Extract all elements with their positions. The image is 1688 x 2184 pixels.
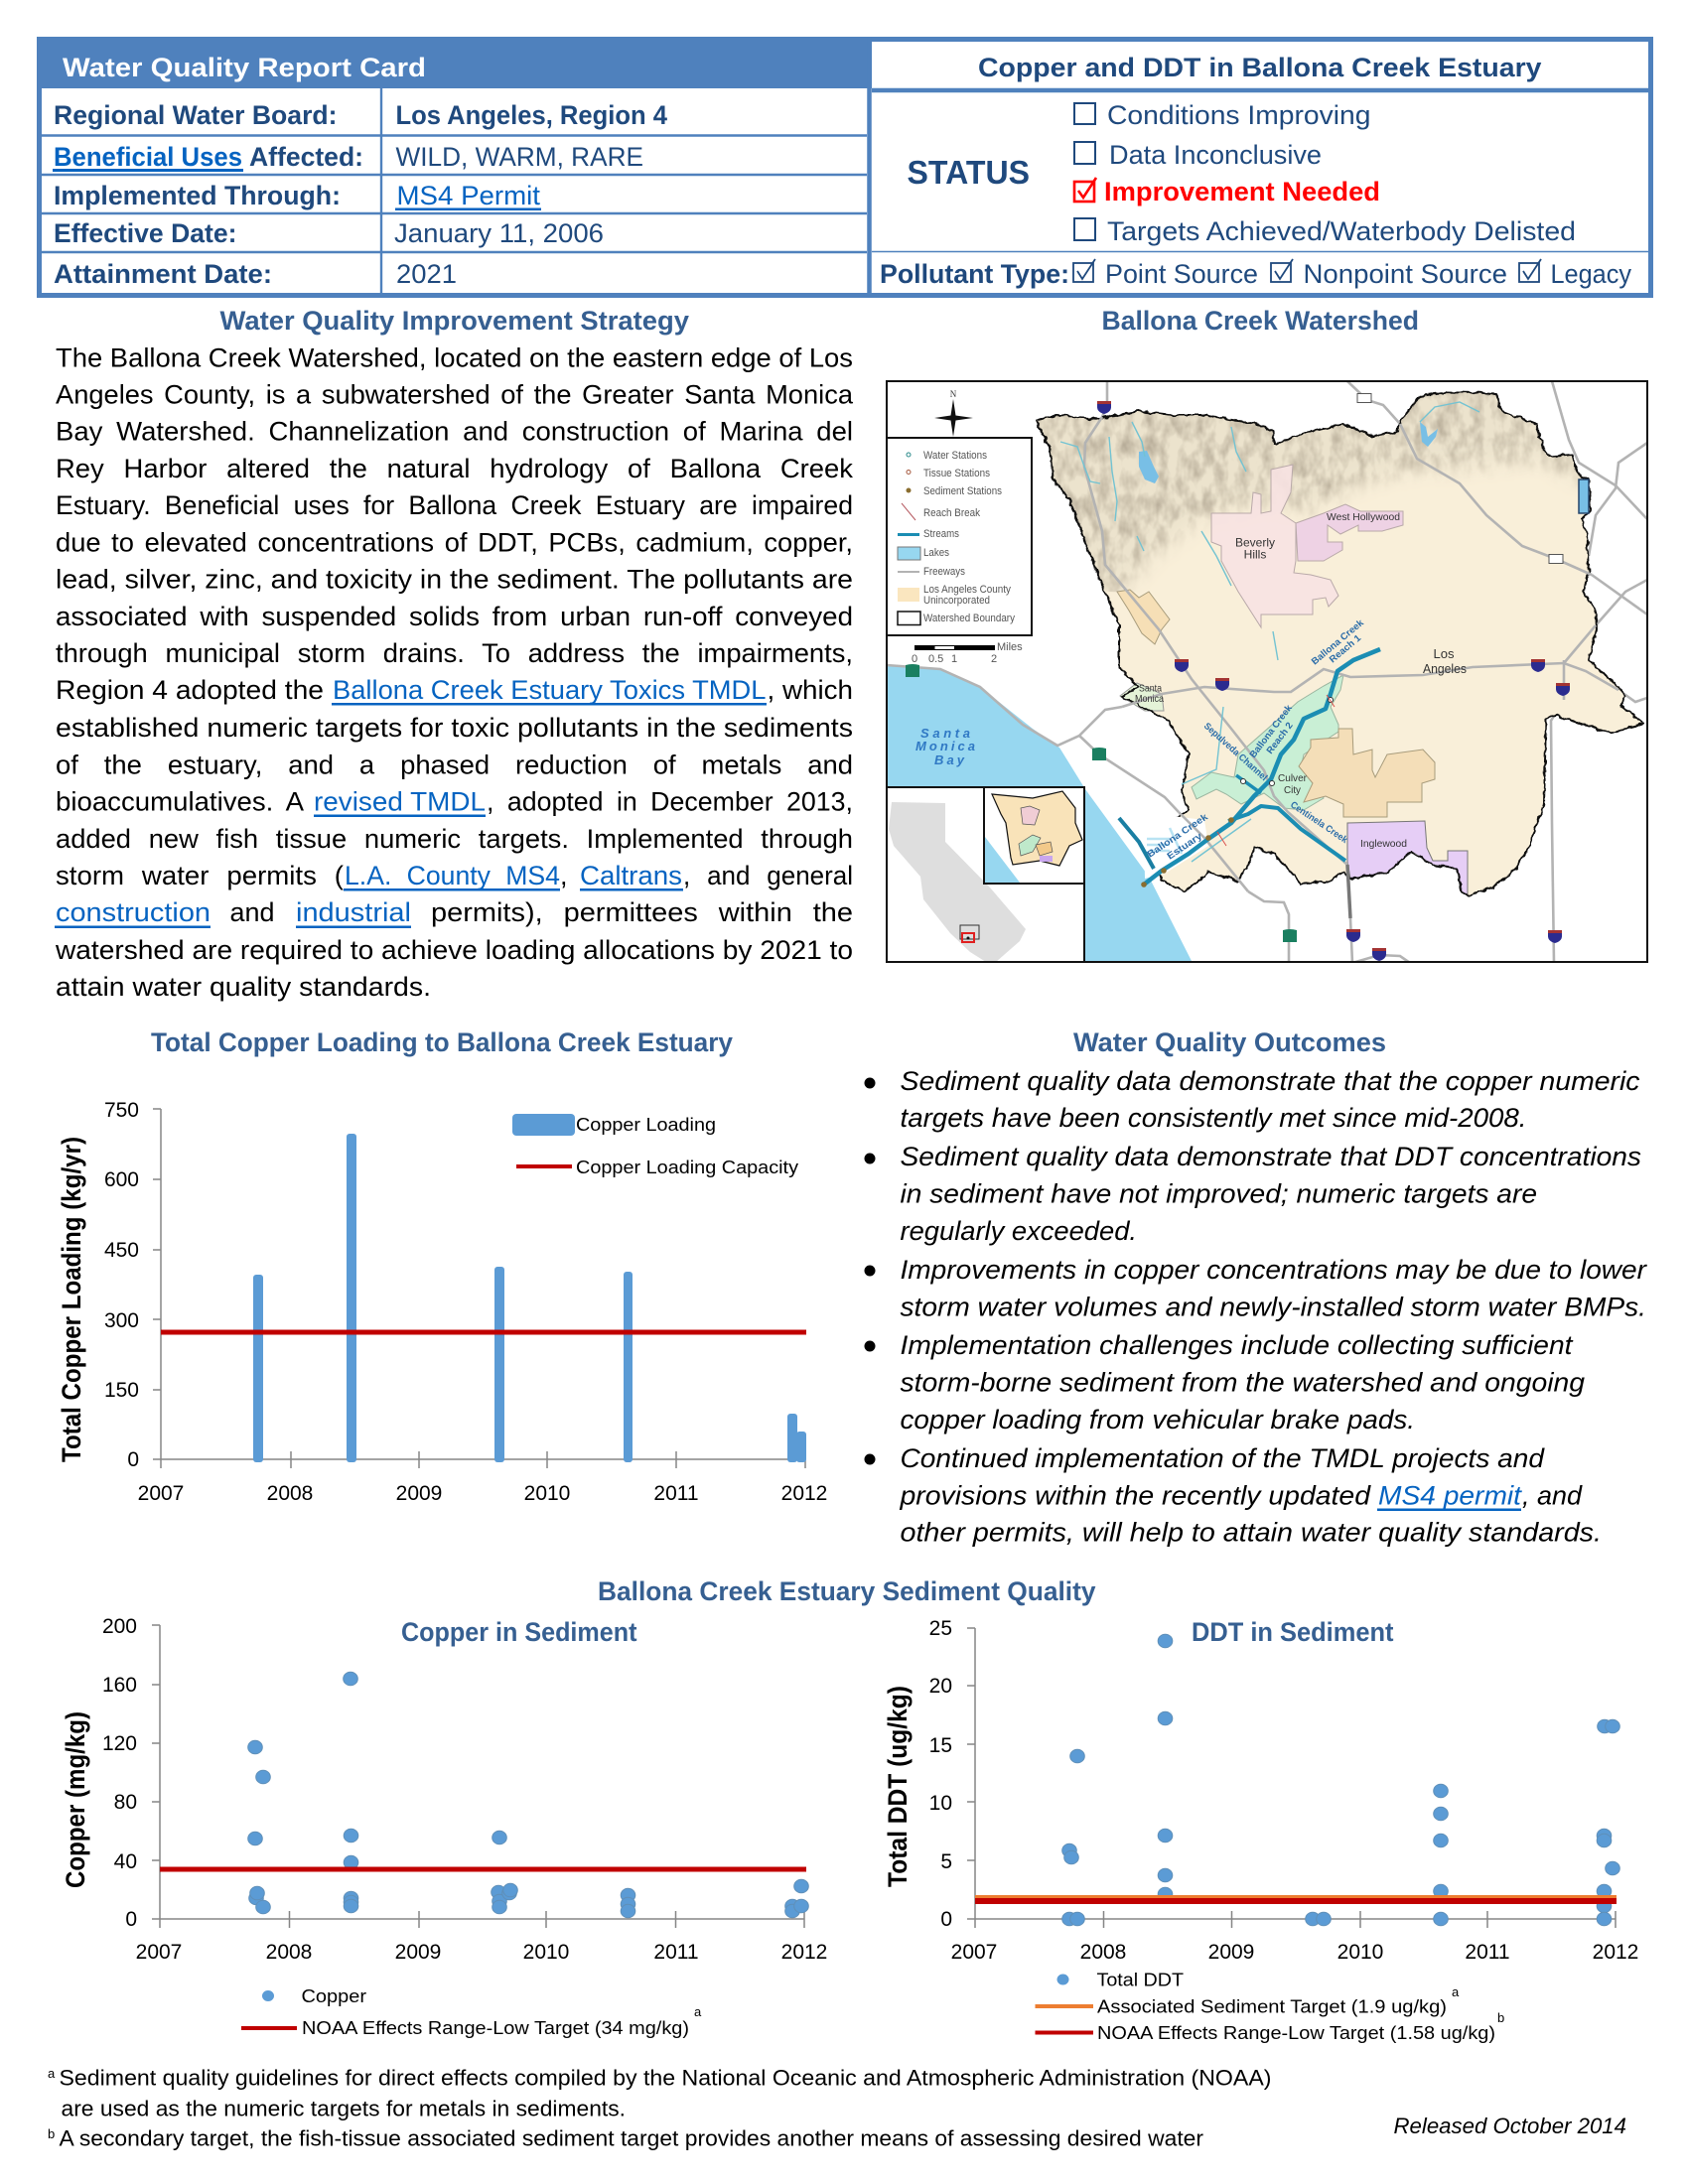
city labels: Culver <box>1278 772 1307 784</box>
x axis labels: 2012 <box>781 1482 827 1505</box>
NOAA target line <box>160 1866 806 1872</box>
stream labels: Ballona Creek <box>1310 617 1366 667</box>
scale bar: 0 <box>912 653 917 665</box>
strategy paragraph: attain water quality standards. <box>56 972 431 1002</box>
row: Regional Water Board: Los Angeles, Region 4 <box>395 100 667 130</box>
x axis labels: 2010 <box>1337 1941 1383 1964</box>
x axis labels: 2010 <box>523 1941 569 1964</box>
x axis labels <box>136 1941 827 1964</box>
map legend box: Lakes <box>923 547 949 559</box>
map legend box: Streams <box>923 528 959 540</box>
legend: Associated Sediment Target (1.9 ug/kg) <box>1097 1996 1447 2017</box>
table outline and row lines <box>40 88 870 296</box>
city labels: Angeles <box>1423 661 1467 676</box>
strategy paragraph: revised TMDL <box>314 787 486 817</box>
legend: Copper Loading Capacity <box>576 1157 799 1177</box>
legend: a <box>1452 1984 1460 1999</box>
scale bar <box>912 641 1023 665</box>
x axis labels: 2007 <box>951 1941 997 1964</box>
strategy paragraph: Angeles County, is a subwatershed of the Greater Santa Monica <box>56 379 854 409</box>
inset: watershed overview <box>984 787 1084 884</box>
x axis labels: 2008 <box>1080 1941 1126 1964</box>
strategy paragraph: through municipal storm drains. To address the impairments, <box>56 638 853 668</box>
map legend box: Water Stations <box>923 450 987 462</box>
bullet 1: targets have been consistently met since mid-2008. <box>900 1103 1527 1133</box>
scale bar: 1 <box>951 653 957 665</box>
bullet 4: storm-borne sediment from the watershed and ongoing <box>900 1368 1585 1398</box>
pollutant type row: Pollutant Type: <box>880 259 1069 289</box>
footnotes: A secondary target, the fish-tissue associated sediment target provides another means of assessing desired water <box>60 2126 1203 2151</box>
x axis labels: 2011 <box>1465 1941 1510 1964</box>
bullet 5: MS4 permit <box>1378 1481 1523 1511</box>
strategy paragraph: , adopted in December 2013, <box>487 787 853 817</box>
bullet 4: Implementation challenges include collecting sufficient <box>900 1330 1574 1360</box>
legend: a <box>694 2004 702 2019</box>
bullet 3: Improvements in copper concentrations may be due to lower <box>900 1255 1647 1285</box>
legend: Copper <box>302 1985 366 2006</box>
strategy paragraph: storm water permits ( <box>56 861 344 890</box>
inset: California locator <box>887 787 1084 962</box>
strategy paragraph: permits), permittees within the <box>431 897 853 927</box>
y axis labels: 80 <box>114 1791 137 1814</box>
strategy paragraph: Estuary. Beneficial uses for Ballona Creek Estuary are impaired <box>56 490 853 520</box>
stream labels: Ballona Creek <box>1248 703 1295 760</box>
chart title: DDT in Sediment <box>1192 1617 1394 1647</box>
y axis labels: 600 <box>104 1168 139 1191</box>
strategy paragraph: , <box>560 861 568 890</box>
strategy paragraph: and <box>230 897 274 927</box>
heading: Water Quality Outcomes: Water Quality Outcomes <box>1073 1027 1386 1057</box>
y axis labels <box>929 1617 952 1931</box>
map legend box: Watershed Boundary <box>923 613 1015 624</box>
legend: Copper Loading <box>576 1114 716 1135</box>
copper loading capacity line <box>161 1330 806 1334</box>
strategy paragraph: due to elevated concentrations of DDT, PCBs, cadmium, copper, <box>56 527 853 557</box>
strategy paragraph: Caltrans <box>580 861 682 890</box>
y axis labels: 0 <box>940 1908 952 1931</box>
bullet 5: other permits, will help to attain water quality standards. <box>900 1518 1602 1548</box>
row: Beneficial Uses Affected <box>53 142 643 172</box>
compass <box>934 389 973 437</box>
row: Beneficial Uses Affected: WILD, WARM, RARE <box>395 142 643 172</box>
city: Inglewood <box>1347 821 1468 895</box>
x axis labels: 2010 <box>524 1482 570 1505</box>
city: Culver City and reach zone <box>1192 675 1343 810</box>
strategy paragraph: bioaccumulatives. A <box>56 787 304 817</box>
outer table frame <box>40 40 1650 296</box>
city labels: City <box>1284 784 1302 796</box>
x axis labels: 2011 <box>653 1941 699 1964</box>
bullet 3: storm water volumes and newly-installed storm water BMPs. <box>900 1293 1646 1322</box>
y axis labels: 160 <box>102 1674 137 1697</box>
y axis labels: 200 <box>102 1615 137 1638</box>
x axis labels: 2007 <box>138 1482 184 1505</box>
footnotes: b <box>48 2126 55 2141</box>
axes <box>967 1628 1616 1928</box>
row: Regional Water Board <box>54 100 667 130</box>
bullet 2: regularly exceeded. <box>900 1216 1137 1246</box>
x axis labels: 2007 <box>136 1941 182 1964</box>
copper data points <box>248 1672 808 1918</box>
legend: NOAA Effects Range-Low Target (1.58 ug/kg) <box>1097 2022 1495 2043</box>
outside freeways <box>887 381 1647 963</box>
heading: Water Quality Improvement Strategy: Water Quality Improvement Strategy <box>220 306 689 336</box>
streams: Ballona Creek and tributaries <box>1119 649 1380 885</box>
bay label: Monica <box>915 739 975 753</box>
map frame <box>887 381 1647 962</box>
bay label: Santa <box>920 726 970 741</box>
legend <box>241 1985 702 2038</box>
row: Implemented Through <box>54 181 541 210</box>
map: Ballona Creek Watershed <box>887 381 1647 963</box>
bullet 2 <box>864 1142 1641 1246</box>
legend: Total DDT <box>1096 1970 1184 1990</box>
compass: N <box>950 389 957 399</box>
report card table <box>37 37 1650 296</box>
y axis labels: 120 <box>102 1732 137 1755</box>
strategy paragraph: established numeric targets for toxic pollutants in the sediments <box>56 713 853 743</box>
scale bar: 0.5 <box>928 653 943 665</box>
map legend box: Reach Break <box>923 507 980 519</box>
x axis labels: 2008 <box>266 1941 312 1964</box>
chart: Total Copper Loading <box>57 1099 827 1505</box>
x axis labels: 2008 <box>267 1482 313 1505</box>
city labels: Hills <box>1244 548 1266 562</box>
inner freeways <box>1084 417 1618 918</box>
watershed area <box>1036 392 1643 895</box>
legend <box>1035 1970 1504 2043</box>
map legend box: Sediment Stations <box>923 485 1002 497</box>
pollutant type row: Legacy <box>1551 259 1631 289</box>
legend: NOAA Effects Range-Low Target (34 mg/kg) <box>302 2017 689 2038</box>
row: Implemented Through: MS4 Permit <box>397 181 541 210</box>
city: West Hollywood <box>1296 504 1403 561</box>
strategy paragraph: added new fish tissue numeric targets. Implemented through <box>56 824 853 854</box>
marina <box>1144 816 1208 879</box>
y axis labels: 10 <box>929 1792 952 1815</box>
bullet 1 <box>864 1066 1640 1133</box>
x axis labels: 2009 <box>395 1941 441 1964</box>
stream labels: Ballona Creek <box>1146 811 1210 860</box>
pollutant type row <box>880 259 1631 289</box>
bullet 5 <box>864 1443 1602 1548</box>
city: Santa Monica <box>1120 683 1164 711</box>
map legend box: Unincorporated <box>923 595 990 607</box>
row: Effective Date: Effective Date: <box>54 218 236 248</box>
strategy paragraph: watershed are required to achieve loading allocations by 2021 to <box>55 935 853 965</box>
heading: Ballona Creek Watershed: Ballona Creek Watershed <box>1102 306 1419 336</box>
row: Effective Date <box>54 218 604 248</box>
map legend box: Los Angeles County <box>923 584 1011 596</box>
strategy paragraph: Rey Harbor altered the natural hydrology of Ballona Creek <box>56 454 853 483</box>
strategy paragraph <box>55 342 854 1002</box>
ocean: Santa Monica Bay <box>887 665 1193 963</box>
bullet 2: in sediment have not improved; numeric targets are <box>900 1179 1537 1209</box>
strategy paragraph: Region 4 adopted the <box>56 675 324 705</box>
row: Beneficial Uses Affected: Beneficial Uses <box>54 142 242 172</box>
strategy paragraph: L.A. County MS4 <box>345 861 560 890</box>
city labels: Santa <box>1139 683 1162 695</box>
heading: Copper and DDT in Ballona Creek Estuary: Copper and DDT in Ballona Creek Estuary <box>978 53 1541 82</box>
stream labels: Centinela Creek <box>1288 799 1350 846</box>
y axis labels: 25 <box>929 1617 952 1640</box>
bay label <box>915 726 975 767</box>
axes <box>153 1109 805 1468</box>
stream labels: Reach 1 <box>1328 632 1364 665</box>
NOAA target line <box>975 1898 1617 1904</box>
stream labels <box>1146 617 1366 862</box>
divider above pollutant type <box>872 250 1648 252</box>
heading: Total Copper Loading chart: Total Copper Loading to Ballona Creek Estuary <box>151 1027 733 1057</box>
map legend box: Freeways <box>923 566 965 578</box>
area: unincorporated Brentwood <box>1117 590 1170 644</box>
y axis labels: 450 <box>104 1239 139 1262</box>
heading: Ballona Creek Estuary Sediment Quality: Ballona Creek Estuary Sediment Quality <box>598 1576 1096 1606</box>
strategy paragraph: , which <box>767 675 853 705</box>
city labels: Beverly <box>1235 536 1275 550</box>
row: Effective Date: January 11, 2006 <box>394 218 604 248</box>
city labels: West Hollywood <box>1327 511 1400 523</box>
pollutant type row: Point Source <box>1105 259 1258 289</box>
strategy paragraph: The Ballona Creek Watershed, located on the eastern edge of Los <box>56 342 853 372</box>
y axis labels: 750 <box>104 1099 139 1122</box>
y axis labels: 0 <box>127 1448 139 1471</box>
legend: b <box>1497 2010 1504 2025</box>
row: Attainment Date <box>54 259 457 289</box>
stream labels: Reach 2 <box>1265 721 1296 756</box>
associated sediment target line <box>975 1895 1617 1899</box>
bullet 5: , and <box>1522 1481 1583 1511</box>
status panel <box>870 37 1648 295</box>
x axis labels: 2012 <box>1593 1941 1638 1964</box>
footnotes <box>48 2066 1271 2151</box>
x axis labels: 2009 <box>1208 1941 1254 1964</box>
y axis labels: 150 <box>104 1379 139 1402</box>
x axis labels <box>951 1941 1638 1964</box>
bullet 5: Continued implementation of the TMDL projects and <box>900 1443 1545 1473</box>
scale bar: 2 <box>991 653 997 665</box>
footnotes: Sediment quality guidelines for direct effects compiled by the National Oceanic and Atmospheric Administration (NOAA) <box>60 2066 1271 2091</box>
strategy paragraph: industrial <box>296 897 411 927</box>
stream labels: Sepulveda Channel <box>1201 721 1269 783</box>
x axis labels: 2009 <box>396 1482 442 1505</box>
panel dividers <box>870 37 1648 295</box>
chart: DDT in Sediment <box>883 1617 1638 2043</box>
bay label: Bay <box>934 752 965 767</box>
y axis labels <box>104 1099 139 1471</box>
outcomes list <box>864 1066 1647 1548</box>
bullet 4 <box>864 1330 1585 1434</box>
y axis labels: 0 <box>125 1908 137 1931</box>
strategy paragraph: associated with suspended solids from urban run-off conveyed <box>56 602 853 631</box>
row: Beneficial Uses Affected: Affected: <box>249 142 363 172</box>
strategy paragraph: construction <box>56 897 211 927</box>
status: Conditions Improving: Conditions Improving <box>1107 100 1370 130</box>
strategy paragraph: Ballona Creek Estuary Toxics TMDL <box>333 675 767 705</box>
sampling stations <box>1141 695 1335 887</box>
highway shields <box>906 393 1570 961</box>
city labels <box>1135 511 1467 850</box>
bullet 3 <box>864 1255 1647 1322</box>
watershed boundary <box>1036 392 1643 895</box>
y axis labels: 5 <box>940 1850 952 1873</box>
city labels: Monica <box>1135 693 1164 705</box>
city: Beverly Hills <box>1211 465 1338 627</box>
axes <box>152 1625 804 1928</box>
bullet 5: provisions within the recently updated <box>899 1481 1371 1511</box>
header band: Water Quality Report Card <box>37 37 872 88</box>
bullet 2: Sediment quality data demonstrate that DDT concentrations <box>900 1142 1641 1171</box>
status: Data Inconclusive: Data Inconclusive <box>1109 140 1322 170</box>
stream labels: Estuary <box>1166 831 1205 862</box>
y axis title: Copper (mg/kg) <box>61 1711 90 1888</box>
mountains shading <box>1036 392 1583 592</box>
lakes <box>1139 422 1589 513</box>
pollutant type row: Nonpoint Source <box>1303 259 1507 289</box>
x axis labels: 2012 <box>781 1941 827 1964</box>
strategy paragraph: of the estuary, and a phased reduction of metals and <box>56 751 853 780</box>
label: STATUS: STATUS <box>908 154 1030 191</box>
x axis labels: 2011 <box>653 1482 699 1505</box>
row: Implemented Through: Implemented Through: <box>54 181 341 210</box>
y axis labels: 20 <box>929 1675 952 1698</box>
heading: Water Quality Report Card: Water Quality Report Card <box>63 53 426 82</box>
strategy paragraph: lead, silver, zinc, and toxicity in the sediment. The pollutants are <box>56 565 853 595</box>
strategy paragraph: Bay Watershed. Channelization and construction of Marina del <box>56 417 853 447</box>
city labels: Los <box>1434 646 1455 661</box>
DDT data points <box>1062 1634 1619 1926</box>
footnotes: a <box>48 2066 56 2081</box>
release date: Released October 2014 <box>1394 2114 1626 2138</box>
y axis labels: 40 <box>114 1850 137 1873</box>
map legend box <box>887 438 1032 635</box>
footnotes: are used as the numeric targets for metals in sediments. <box>62 2097 626 2121</box>
status: Targets Achieved/Waterbody Delisted: Targets Achieved/Waterbody Delisted <box>1107 216 1576 246</box>
chart title: Copper in Sediment <box>401 1617 637 1647</box>
copper loading bars <box>253 1134 806 1462</box>
thin streams <box>1060 402 1479 862</box>
y axis labels: 15 <box>929 1734 952 1757</box>
area: unincorporated Ladera <box>1299 729 1435 817</box>
legend <box>512 1114 799 1177</box>
y axis labels: 300 <box>104 1309 139 1332</box>
y axis labels <box>102 1615 137 1931</box>
city labels: Inglewood <box>1360 838 1407 850</box>
bullet 4: copper loading from vehicular brake pads. <box>900 1405 1415 1434</box>
status: Improvement Needed (checked): Improvement Needed <box>1104 177 1380 206</box>
row: Attainment Date: Attainment Date: <box>54 259 272 289</box>
map legend box: Tissue Stations <box>923 468 990 479</box>
x axis labels <box>138 1482 827 1505</box>
y axis title: Total DDT (ug/kg) <box>883 1686 913 1887</box>
chart: Copper in Sediment <box>61 1615 827 2038</box>
scale bar: Miles <box>997 641 1023 653</box>
row: Regional Water Board: Regional Water Board: <box>54 100 338 130</box>
row: Attainment Date: 2021 <box>396 259 457 289</box>
y axis title: Total Copper Loading (kg/yr) <box>57 1137 86 1462</box>
strategy paragraph: , and general <box>683 861 853 890</box>
bullet 1: Sediment quality data demonstrate that the copper numeric <box>900 1066 1640 1096</box>
